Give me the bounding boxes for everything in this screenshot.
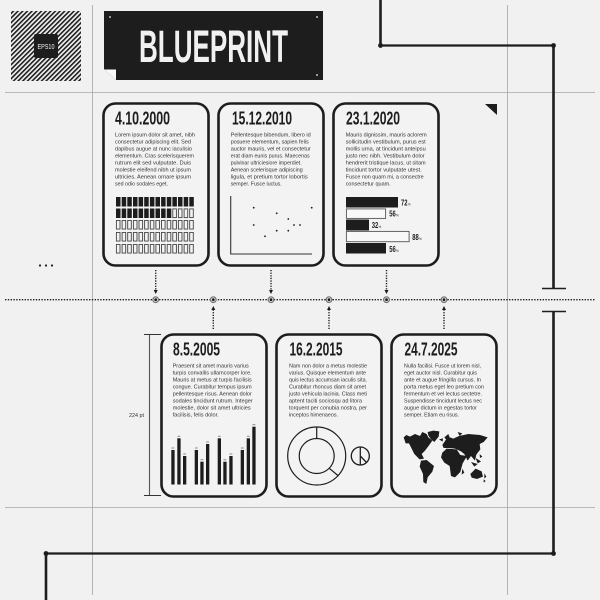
chart: donut [288, 427, 346, 485]
text block: Suspendisse tincidunt lectus nec [404, 398, 482, 404]
chart: horizontal bars: % [396, 249, 399, 253]
text block: ligula, et pretium tortor lobortis [231, 174, 308, 180]
chart: horizontal bars: 56 [389, 245, 396, 254]
chart: horizontal bars: 72 [401, 198, 408, 208]
corner triangle mark [485, 104, 497, 115]
text block: augue dictum in egestas tortor [404, 406, 477, 412]
text block: molestie eleifend nibh ut ipsum [115, 168, 191, 174]
text block: Mauris at metus at turpis facilisis [173, 378, 252, 384]
text block: Mauris dignissim, mauris aclorem [346, 132, 427, 138]
panel: 15.12.2010: 15.12.2010 [232, 108, 292, 128]
thick connector: bottom [44, 311, 566, 600]
chart: horizontal bars: 88 [412, 233, 419, 242]
chart: horizontal bars: % [396, 214, 399, 218]
icon: world map [404, 431, 488, 484]
chart: horizontal bars: % [378, 225, 381, 229]
chart: grouped column bars [171, 424, 256, 484]
chart: horizontal bars: % [419, 237, 422, 241]
chart: horizontal bars: 56 [389, 210, 396, 218]
text block: hendrerit tristique lacus, ut sitam [346, 160, 426, 166]
text block: aptent taciti sociosqu ad litora [289, 398, 363, 404]
text block: Fusce non quam mi, a consectre [346, 174, 424, 180]
chart: small pie [351, 447, 369, 465]
panel: 8.5.2005 [162, 334, 266, 496]
text block: consectetur quam. [346, 182, 391, 188]
panel: 24.7.2025: 24.7.2025 [404, 338, 458, 360]
text block: rutrum elit sed vulputate. Duis [115, 160, 191, 166]
thick connector: top [378, 0, 566, 288]
text block: tincidunt tortor vulputate utest. [346, 168, 422, 174]
text block: torquent per conubia nostra, per [289, 406, 367, 412]
text block: fermentum et vel lectus sectetre. [404, 392, 482, 398]
panel: 16.2.2015: 16.2.2015 [290, 338, 342, 360]
text block: elementum. Cras scelerisquerem [115, 154, 194, 160]
text block: sed odio sodales eget. [115, 182, 168, 188]
text block: ante et augue fringilla cursus. In [404, 378, 481, 384]
text block: turpis convallis ullamcorper lore. [173, 370, 252, 376]
text block [173, 364, 253, 418]
dimension: 224 pt [129, 334, 161, 496]
text block: semper. Fusce luctus. [231, 182, 282, 188]
badge: EPS10 striped square: EPS10 [38, 42, 54, 51]
text block [288, 364, 368, 418]
text block: sodales tincidunt rutrum. Integer [173, 398, 253, 404]
text block: quis lectus accumsan iaculis sita. [289, 378, 367, 384]
text block: consectetur adipiscing elit. Sed [115, 140, 191, 146]
title banner: BLUEPRINT [139, 21, 288, 72]
panel: 23.1.2020: 23.1.2020 [346, 108, 400, 128]
text block: semper. Etiam eu risus. [404, 412, 459, 418]
text block: Curabitur rhoncus diam sit amet [289, 384, 366, 390]
text block: Pellentesque bibendum, libero id [231, 132, 311, 138]
text block: porta metus eget leo pretium con [404, 384, 484, 390]
panel: 8.5.2005: 8.5.2005 [173, 338, 220, 360]
text block [404, 364, 484, 418]
panel: 16.2.2015 [276, 334, 382, 496]
text block: mollis urna, at tincidunt anteipsu [346, 146, 426, 152]
text block: auctor mauris, vel et consectetur [231, 146, 311, 152]
three dots [39, 264, 53, 267]
text block: justo nec nibh. Vestibulum dolor [345, 154, 425, 160]
panel: 4.10.2000: 4.10.2000 [115, 108, 170, 128]
text block: Aenean scelerisque adipiscing [231, 168, 303, 174]
text block: molestie, dolor sit amet ultricies [173, 406, 251, 412]
dimension: 224 pt: 224 pt [129, 413, 144, 419]
text block: inceptos himenaeos. [289, 412, 338, 418]
text block: facilisis, felis dolor. [173, 412, 219, 418]
text block: Nam non dolor a metus molestie [289, 364, 368, 370]
panel: 15.12.2010 [218, 104, 324, 266]
text block [345, 132, 427, 188]
text block: eget auctor nisl. Curabitur quis [404, 370, 477, 376]
text block: posuere elementum, sapien felis [231, 140, 309, 146]
text block [115, 132, 195, 188]
text block: dapibus augue at nunc iaculisio [115, 146, 193, 152]
text block: congue. Curabitur tempus ipsum [173, 384, 252, 390]
text block: justo vehicula lacinia. Class meti [288, 392, 367, 398]
text block: Praesent sit amet mauris varius [173, 364, 249, 370]
text block: ultricies. Aenean ornare ipsum [115, 174, 191, 180]
badge: EPS10 striped square [11, 11, 81, 81]
chart: horizontal bars: 32 [372, 221, 379, 230]
text block: erat diam eunis purus. Maecenas [231, 154, 310, 160]
chart: unit grid [116, 197, 194, 253]
text block: pellentesque risus. Aenean dolor [173, 392, 252, 398]
text block: Lorem ipsum dolor sit amet, nibh [115, 132, 195, 138]
panel: 4.10.2000 [104, 104, 208, 266]
text block: varius. Quisque elementum ante [289, 370, 367, 376]
chart: scatter plot [231, 196, 313, 254]
text block: pulvinar ultriciesiore imperdiet. [231, 160, 302, 166]
text block [231, 132, 311, 188]
chart: horizontal bars [346, 197, 422, 254]
title banner [104, 11, 323, 80]
text block: Nulla facilisi. Fusce ut lorem nisl, [404, 364, 481, 370]
timeline [5, 270, 595, 329]
chart: horizontal bars: % [408, 202, 411, 206]
text block: sollicitudin vestibulum, purus est [346, 140, 426, 146]
panel: 23.1.2020 [334, 104, 438, 266]
panel: 24.7.2025 [392, 334, 496, 496]
